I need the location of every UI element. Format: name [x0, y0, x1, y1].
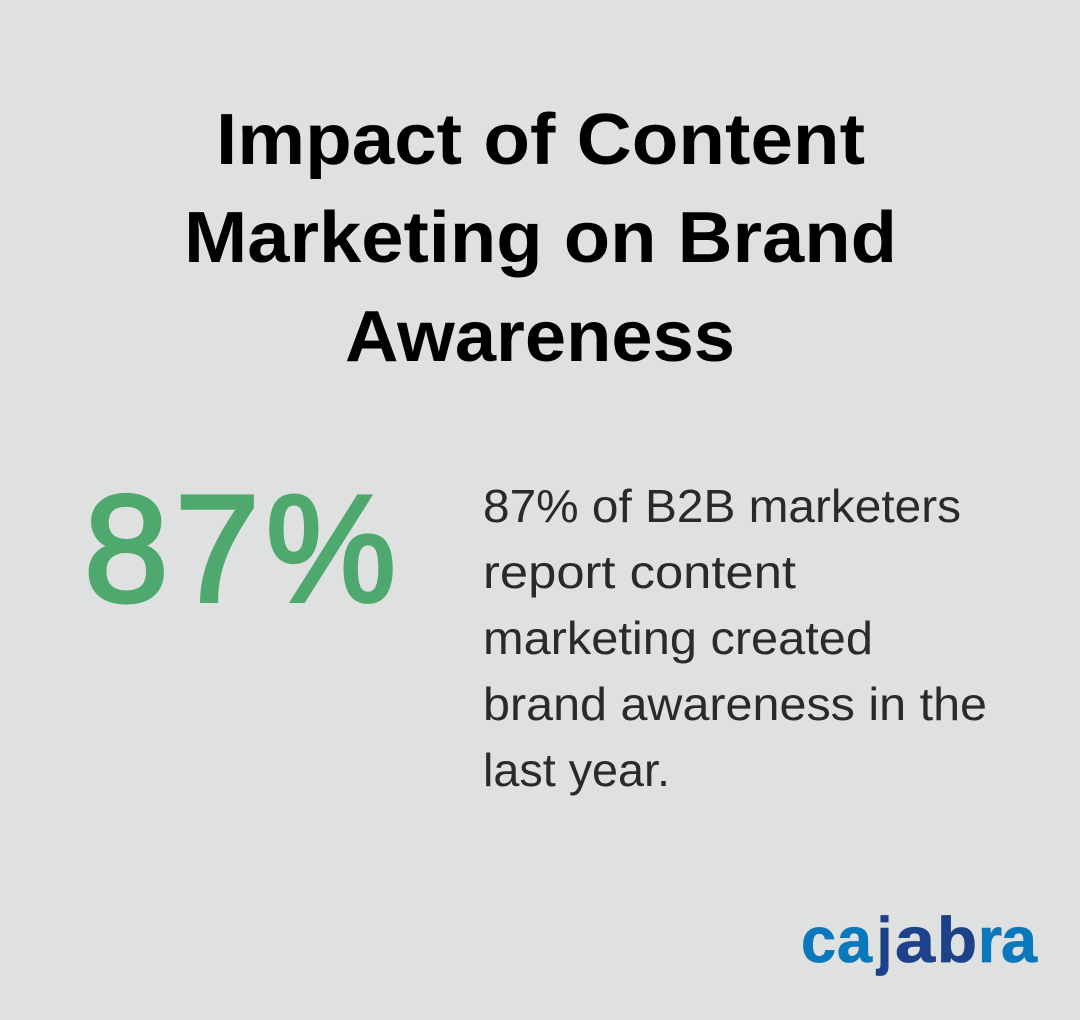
- description text: marketing created: [483, 612, 873, 664]
- logo: cajabra: a: [895, 904, 935, 976]
- big statistic: 87%: 7: [175, 464, 260, 634]
- logo: cajabra: [801, 904, 1037, 976]
- description text: 87% of B2B marketers: [483, 480, 961, 532]
- title: Awareness: [345, 297, 735, 377]
- title: Marketing on Brand: [184, 198, 897, 278]
- logo: cajabra: b: [937, 904, 977, 976]
- big statistic: 87%: %: [266, 464, 396, 634]
- logo: cajabra: j: [876, 904, 892, 976]
- description text: [483, 480, 987, 796]
- description text: report content: [483, 546, 796, 598]
- description text: brand awareness in the: [483, 678, 987, 730]
- title: [184, 100, 897, 377]
- logo: cajabra: a: [837, 904, 872, 976]
- logo: cajabra: c: [801, 904, 836, 976]
- big statistic: 87%: 8: [84, 464, 169, 634]
- logo: cajabra: a: [1001, 904, 1037, 976]
- description text: last year.: [483, 744, 670, 796]
- big statistic: 87%: [84, 464, 396, 634]
- title: Impact of Content: [216, 100, 865, 180]
- logo: cajabra: r: [978, 904, 1002, 976]
